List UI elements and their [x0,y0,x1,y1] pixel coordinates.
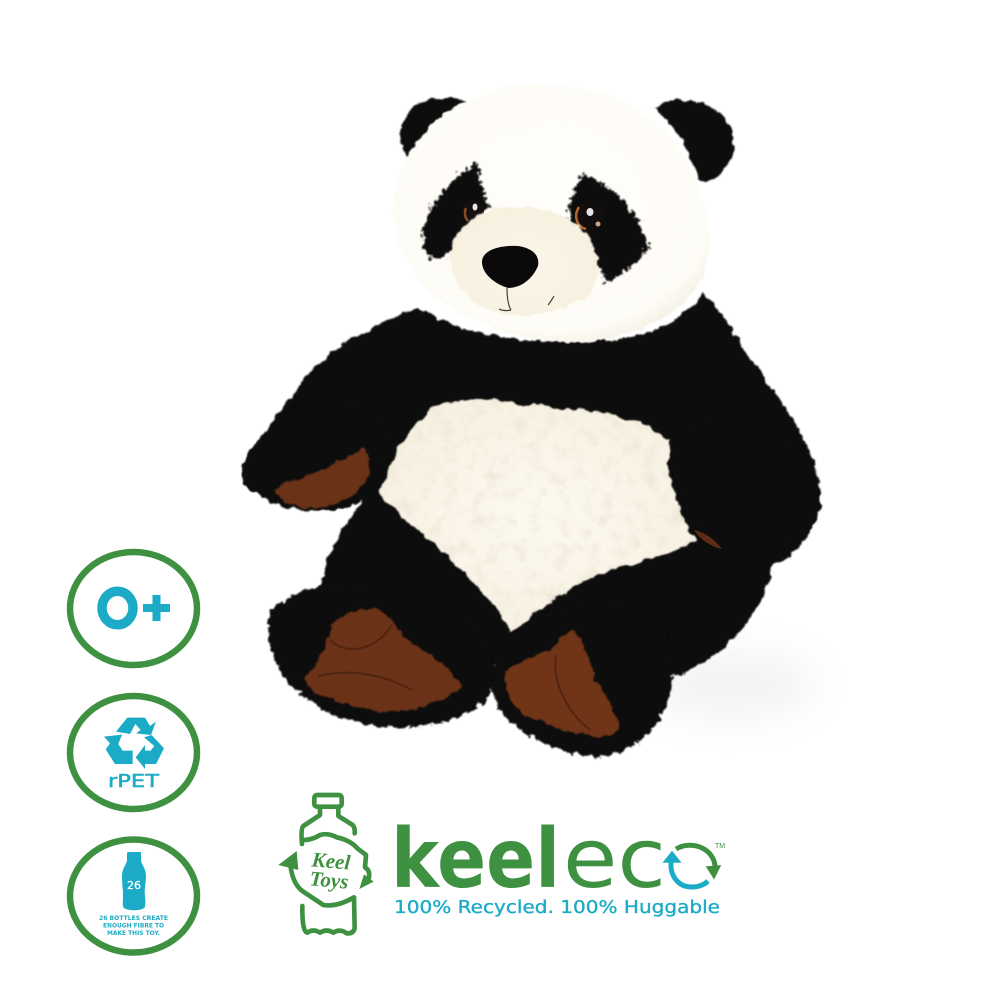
right eye patch [568,174,650,282]
floor shadow [645,650,815,720]
bottle number: 26 [127,879,141,892]
belly [378,399,697,632]
tagline: 100% Recycled. 100% Huggable [394,897,720,918]
trademark: TM [715,843,725,850]
icon: recycling arrows [104,718,164,769]
right eye [574,201,604,231]
left hand pad [273,449,370,508]
bottle caption: MAKE THIS TOY. [107,930,160,937]
right foot pad seam [555,655,590,730]
left arm overlap [242,396,395,511]
left ear [400,98,465,160]
rPET label: rPET [108,771,160,792]
logo wordmark on bottle: Toys [309,866,350,894]
panda back and arms [242,292,820,675]
bottle caption: ENOUGH FIBRE TO [103,922,164,930]
left foot pad seam [318,625,412,690]
bottle caption [99,915,168,937]
wordmark o with arrows [664,845,720,887]
head [393,84,710,342]
keeleco logo [278,795,725,933]
left foot [268,582,496,728]
left foot pad [305,608,462,712]
icon: bottle [122,852,146,910]
logo wordmark on bottle: Keel [310,847,351,875]
nose [482,246,538,288]
logo bottle icon [278,795,374,933]
right foot [491,598,673,757]
badge: rPET recycled [70,696,197,809]
wordmark ec: ec [563,812,666,907]
badge: 26 bottles [70,840,197,952]
left eye [462,200,484,222]
right arm overlap [670,411,820,560]
mouth [499,288,554,311]
right ear [654,100,733,181]
right hand pad [694,530,722,549]
muzzle [450,207,599,315]
bottle caption: 26 BOTTLES CREATE [99,915,168,922]
age text [102,591,170,625]
logo wordmark on bottle [309,847,351,894]
wordmark keel: keel [391,812,560,907]
left eye patch [422,163,490,259]
right foot pad [505,631,620,737]
panda plush toy [242,84,820,757]
badge: age 0+ [70,552,197,665]
